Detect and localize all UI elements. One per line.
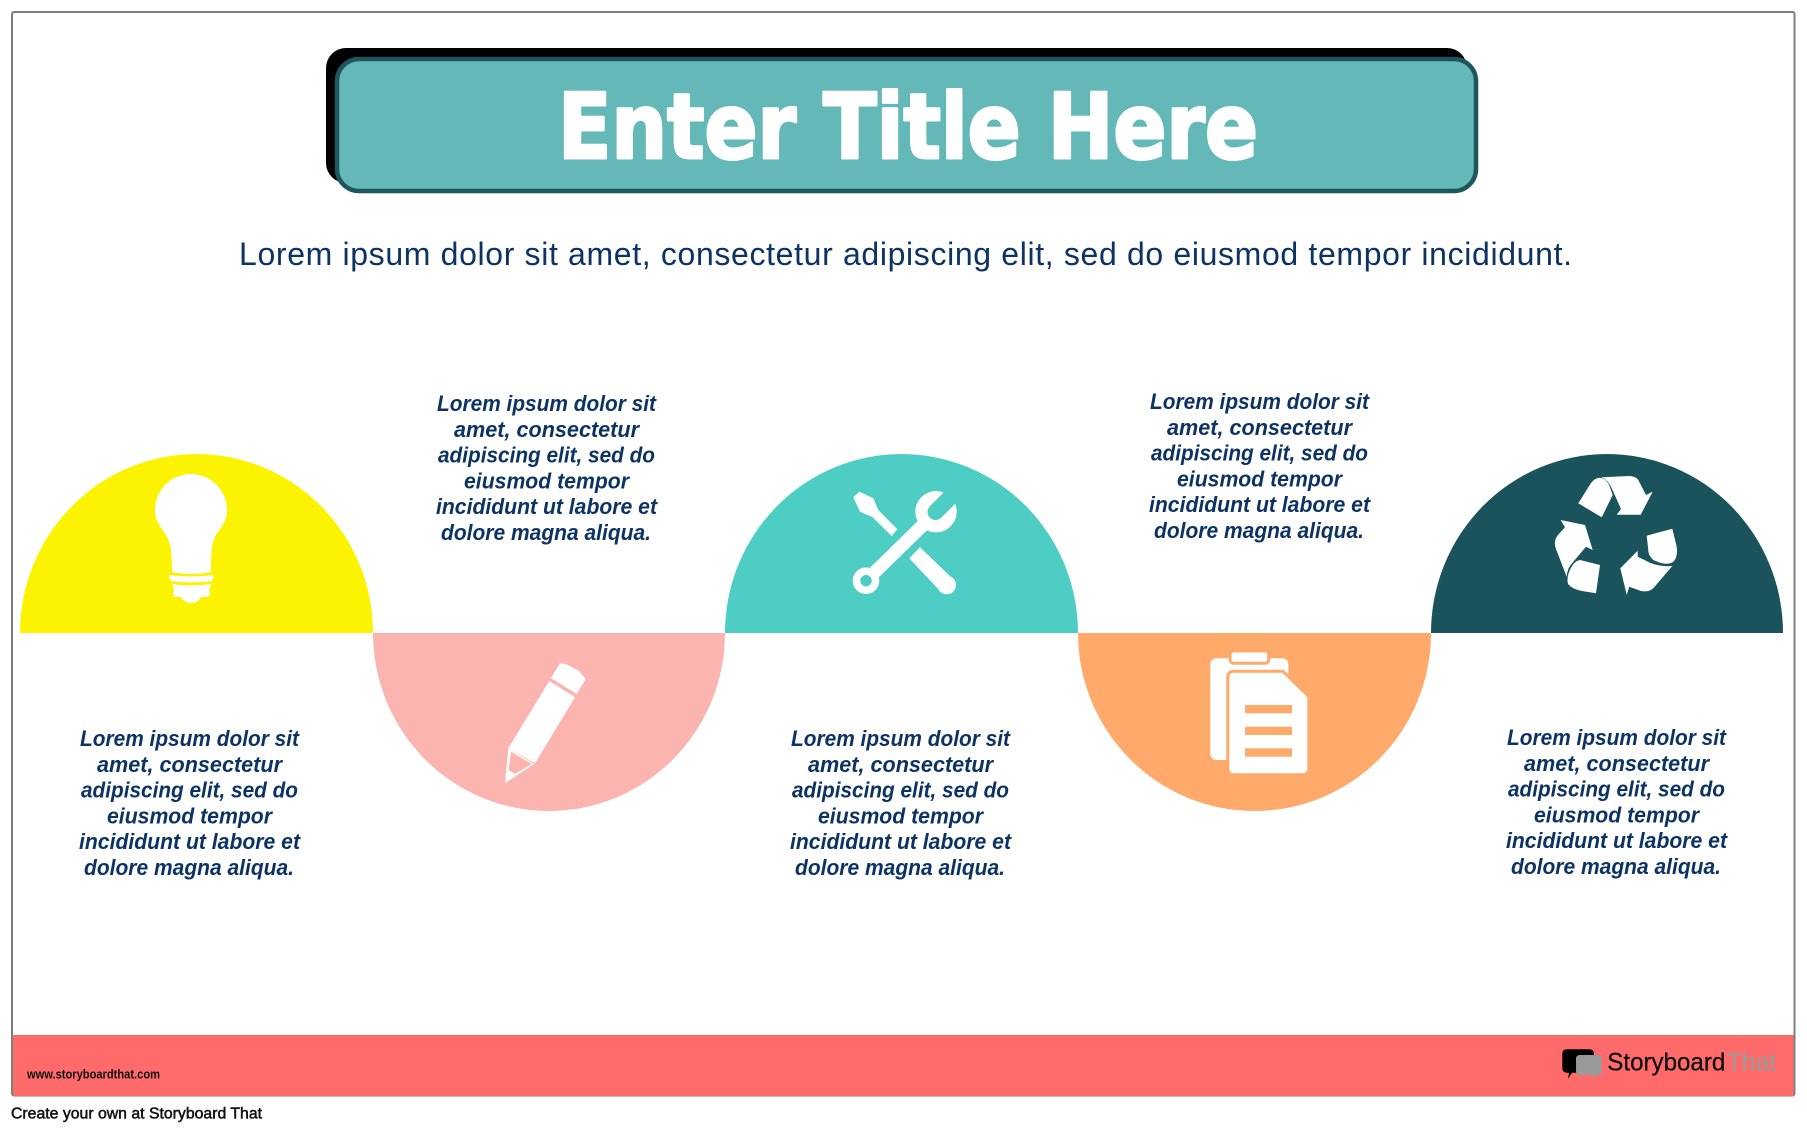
text block: step 1: Lorem ipsum dolor sit (80, 726, 301, 751)
text block: step 3: adipiscing elit, sed do (792, 778, 1009, 803)
text block: step 2 (436, 391, 659, 545)
step 3: teal semicircle with tools (725, 454, 1078, 633)
text block: step 1: adipiscing elit, sed do (81, 778, 298, 803)
step 2: pink semicircle with pencil (373, 633, 725, 811)
icon: light bulb (155, 474, 227, 603)
title banner (326, 48, 1476, 191)
icon: pencil (505, 663, 586, 783)
text block: step 2: amet, consectetur (454, 417, 640, 442)
credit line: Create your own at Storyboard That (11, 1106, 263, 1122)
text block: step 3: dolore magna aliqua. (795, 855, 1005, 880)
title: Enter Title Here (558, 75, 1258, 180)
step 4: orange semicircle with clipboard (1078, 633, 1431, 811)
text block: step 5: dolore magna aliqua. (1511, 854, 1721, 879)
text block: step 4: Lorem ipsum dolor sit (1150, 389, 1371, 414)
text block: step 1: amet, consectetur (97, 752, 283, 777)
subtitle: Lorem ipsum dolor sit amet, consectetur adipiscing elit, sed do eiusmod tempor incididunt. (239, 236, 1572, 272)
icon: clipboard (1210, 651, 1307, 773)
text block: step 1: eiusmod tempor (107, 803, 273, 828)
text block: step 4 (1149, 389, 1372, 543)
text block: step 2: adipiscing elit, sed do (438, 443, 655, 468)
text block: step 2: dolore magna aliqua. (441, 520, 651, 545)
text block: step 4: amet, consectetur (1167, 415, 1353, 440)
text block: step 1 (79, 726, 302, 880)
logo (1562, 1048, 1776, 1079)
footer bar (13, 1035, 1794, 1096)
text block: step 2: incididunt ut labore et (436, 494, 659, 519)
text block: step 5: incididunt ut labore et (1506, 828, 1729, 853)
text block: step 5: eiusmod tempor (1534, 802, 1700, 827)
text block: step 3: Lorem ipsum dolor sit (791, 726, 1012, 751)
text block: step 3 (790, 726, 1013, 880)
text block: step 4: dolore magna aliqua. (1154, 518, 1364, 543)
text block: step 1: dolore magna aliqua. (84, 855, 294, 880)
text block: step 5: Lorem ipsum dolor sit (1507, 725, 1728, 750)
logo: Storyboard (1607, 1048, 1725, 1076)
text block: step 4: adipiscing elit, sed do (1151, 441, 1368, 466)
text block: step 5: amet, consectetur (1524, 751, 1710, 776)
text block: step 1: incididunt ut labore et (79, 829, 302, 854)
logo: That (1727, 1048, 1776, 1076)
footer url: www.storyboardthat.com (26, 1066, 160, 1082)
step 5: dark teal semicircle with recycle icon (1431, 454, 1783, 633)
icon: recycling arrows (1555, 476, 1677, 595)
text block: step 2: eiusmod tempor (464, 468, 630, 493)
text block: step 5 (1506, 725, 1729, 879)
text block: step 5: adipiscing elit, sed do (1508, 777, 1725, 802)
text block: step 3: amet, consectetur (808, 752, 994, 777)
text block: step 4: incididunt ut labore et (1149, 492, 1372, 517)
text block: step 2: Lorem ipsum dolor sit (437, 391, 658, 416)
text block: step 3: incididunt ut labore et (790, 829, 1013, 854)
step 1: yellow semicircle with bulb (20, 454, 373, 633)
text block: step 4: eiusmod tempor (1177, 466, 1343, 491)
text block: step 3: eiusmod tempor (818, 803, 984, 828)
icon: screwdriver and wrench (853, 476, 971, 594)
